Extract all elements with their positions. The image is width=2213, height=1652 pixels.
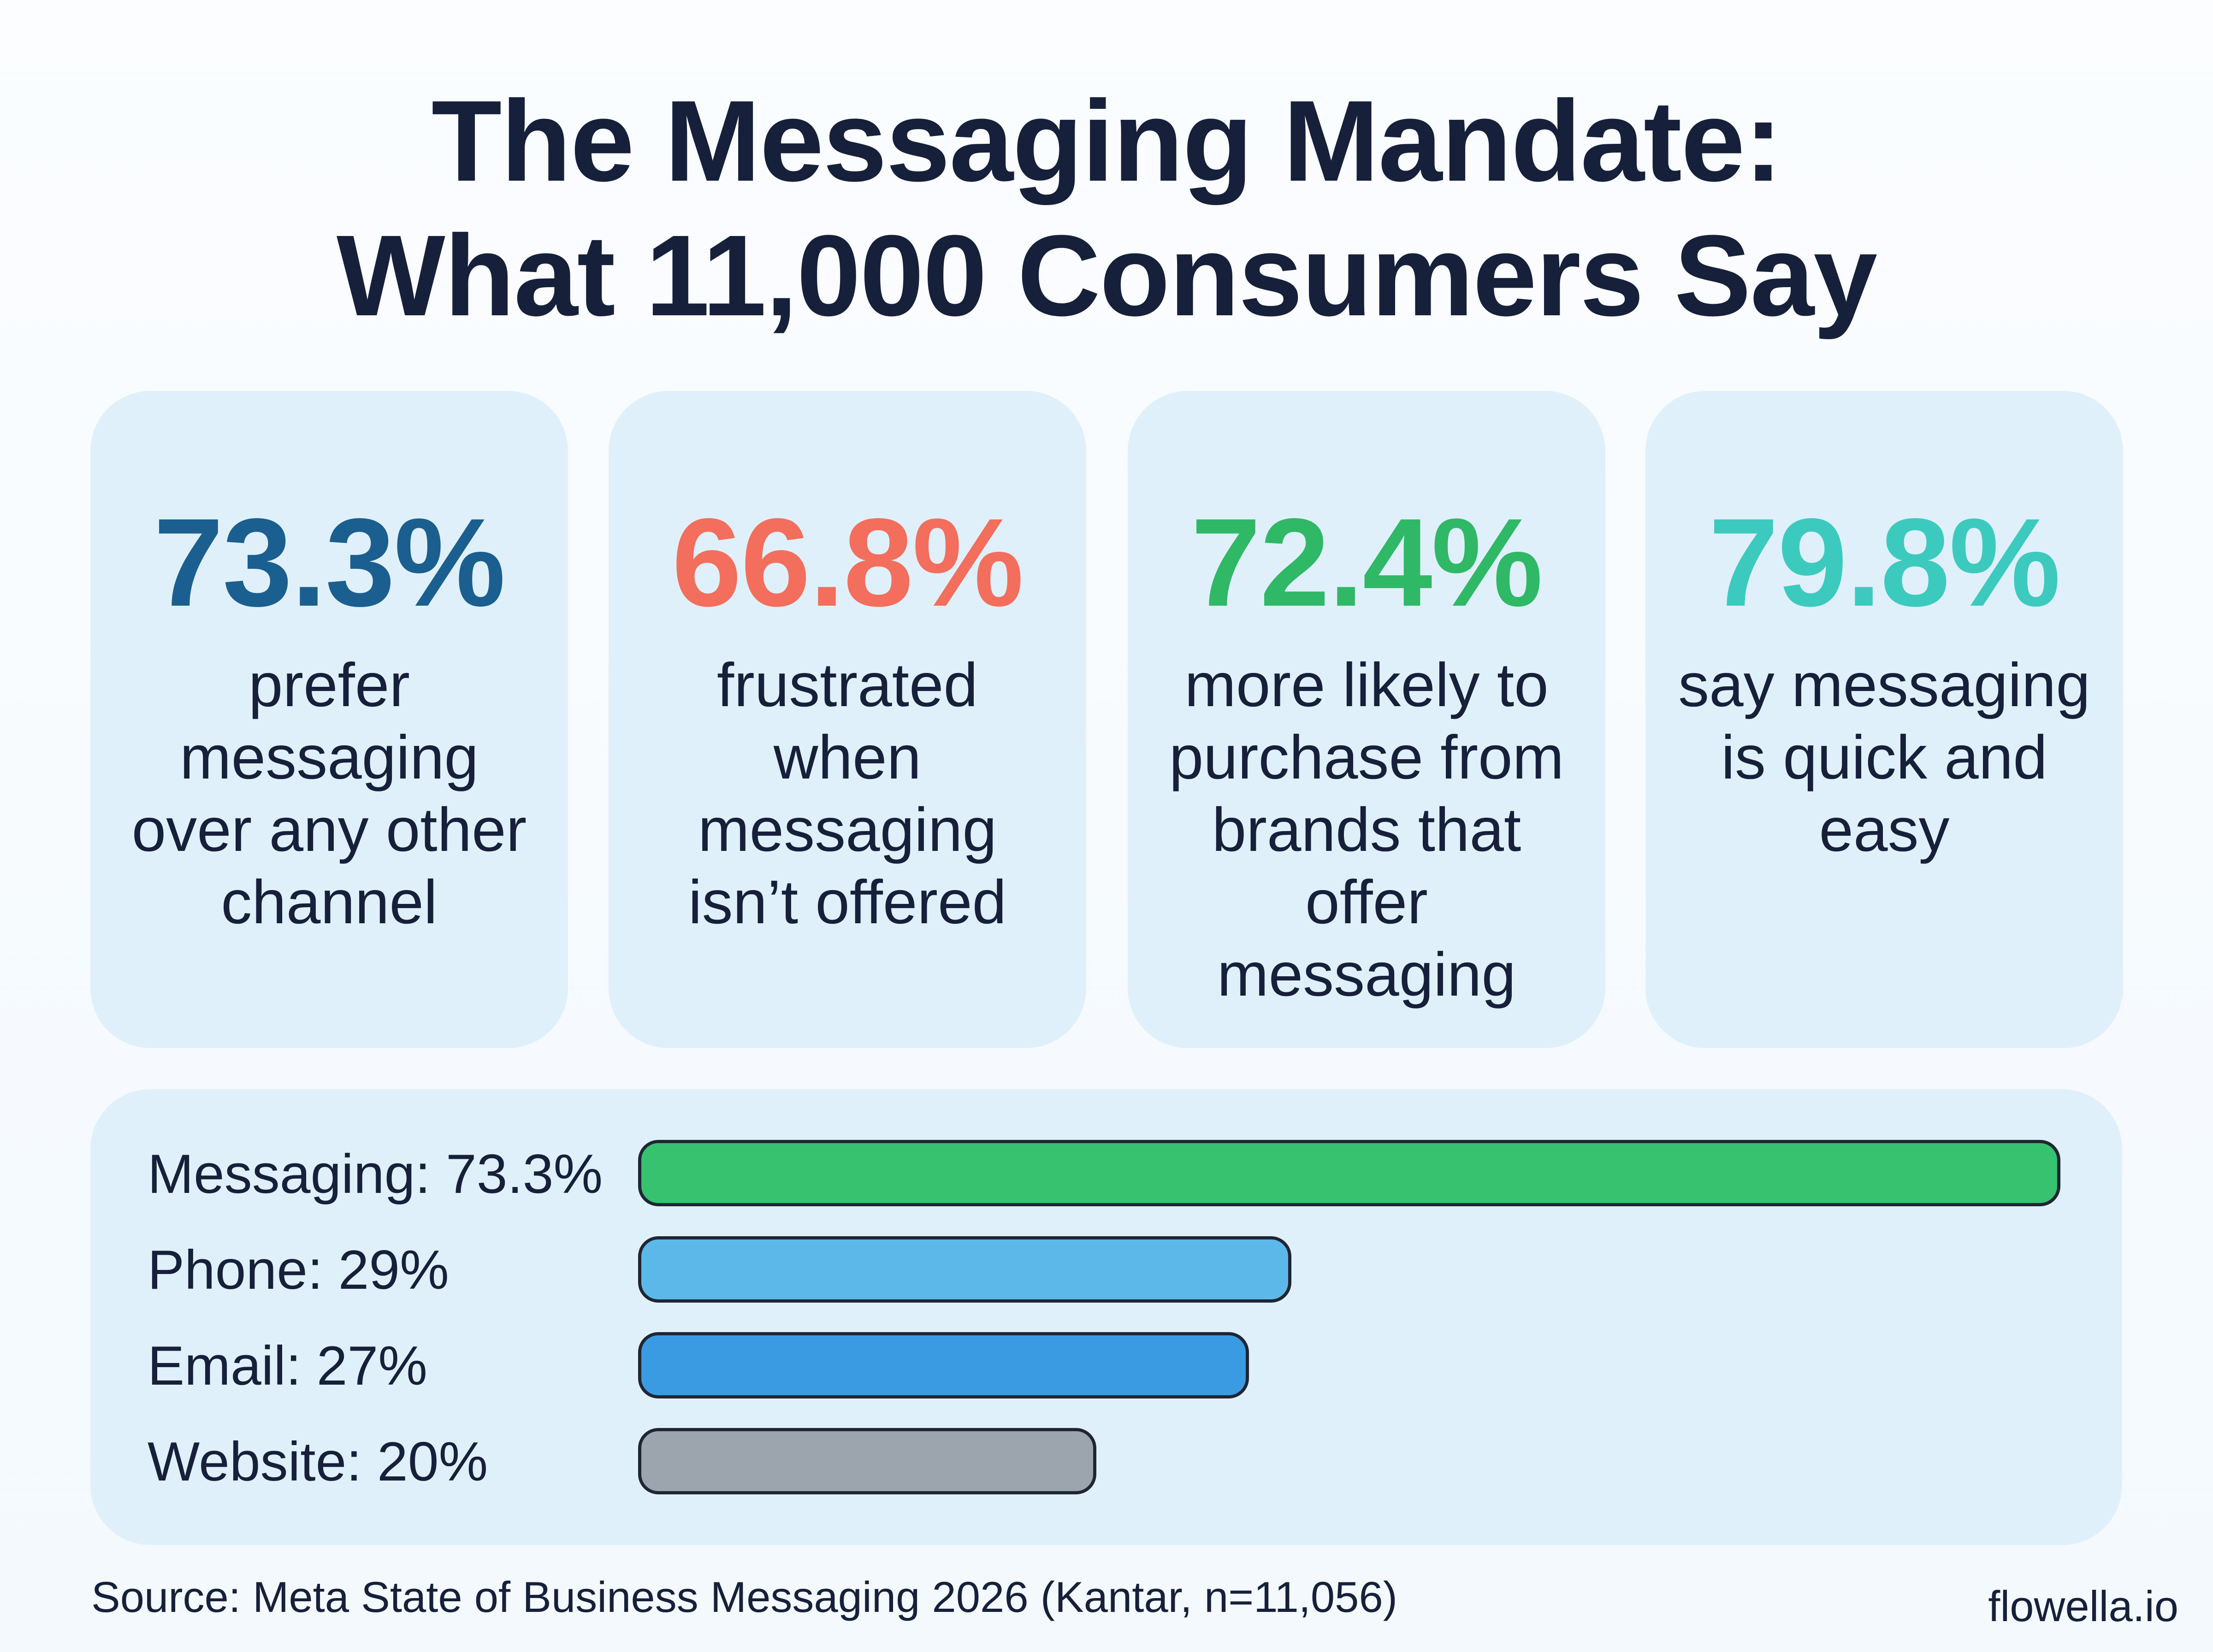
panel: channel bar chart xyxy=(90,1089,2122,1545)
title xyxy=(0,74,2213,343)
card: quick and easy xyxy=(1645,391,2123,1048)
label: email: Email: 27% xyxy=(148,1335,427,1397)
card: quick and easy: say messaging is quick and easy xyxy=(1678,651,2090,864)
bar: messaging xyxy=(638,1140,2060,1206)
label: website: Website: 20% xyxy=(148,1431,488,1493)
label: messaging: Messaging: 73.3% xyxy=(148,1143,603,1205)
card: quick and easy: 79.8% xyxy=(1709,492,2060,632)
label: phone: Phone: 29% xyxy=(148,1239,449,1301)
source: Source: Meta State of Business Messaging 2026 (Kantar, n=11,056) xyxy=(91,1573,1397,1621)
brand: flowella.io xyxy=(1988,1582,2178,1630)
title: What 11,000 Consumers Say xyxy=(337,211,1876,340)
card: more likely to purchase: 72.4% xyxy=(1191,492,1542,632)
card: prefer messaging xyxy=(90,391,568,1048)
bar: website xyxy=(638,1428,1096,1494)
card: prefer messaging: prefer messaging over any other channel xyxy=(132,651,527,937)
card: frustrated xyxy=(609,391,1086,1048)
card: frustrated: 66.8% xyxy=(672,492,1023,632)
card: more likely to purchase: more likely to purchase from brands that offer messaging xyxy=(1169,651,1564,1009)
card: prefer messaging: 73.3% xyxy=(154,492,505,632)
card: more likely to purchase xyxy=(1128,391,1605,1048)
card: frustrated: frustrated when messaging isn’t offered xyxy=(688,651,1006,937)
bar: email xyxy=(638,1332,1249,1398)
title: The Messaging Mandate: xyxy=(432,77,1781,205)
bar: phone xyxy=(638,1236,1291,1303)
